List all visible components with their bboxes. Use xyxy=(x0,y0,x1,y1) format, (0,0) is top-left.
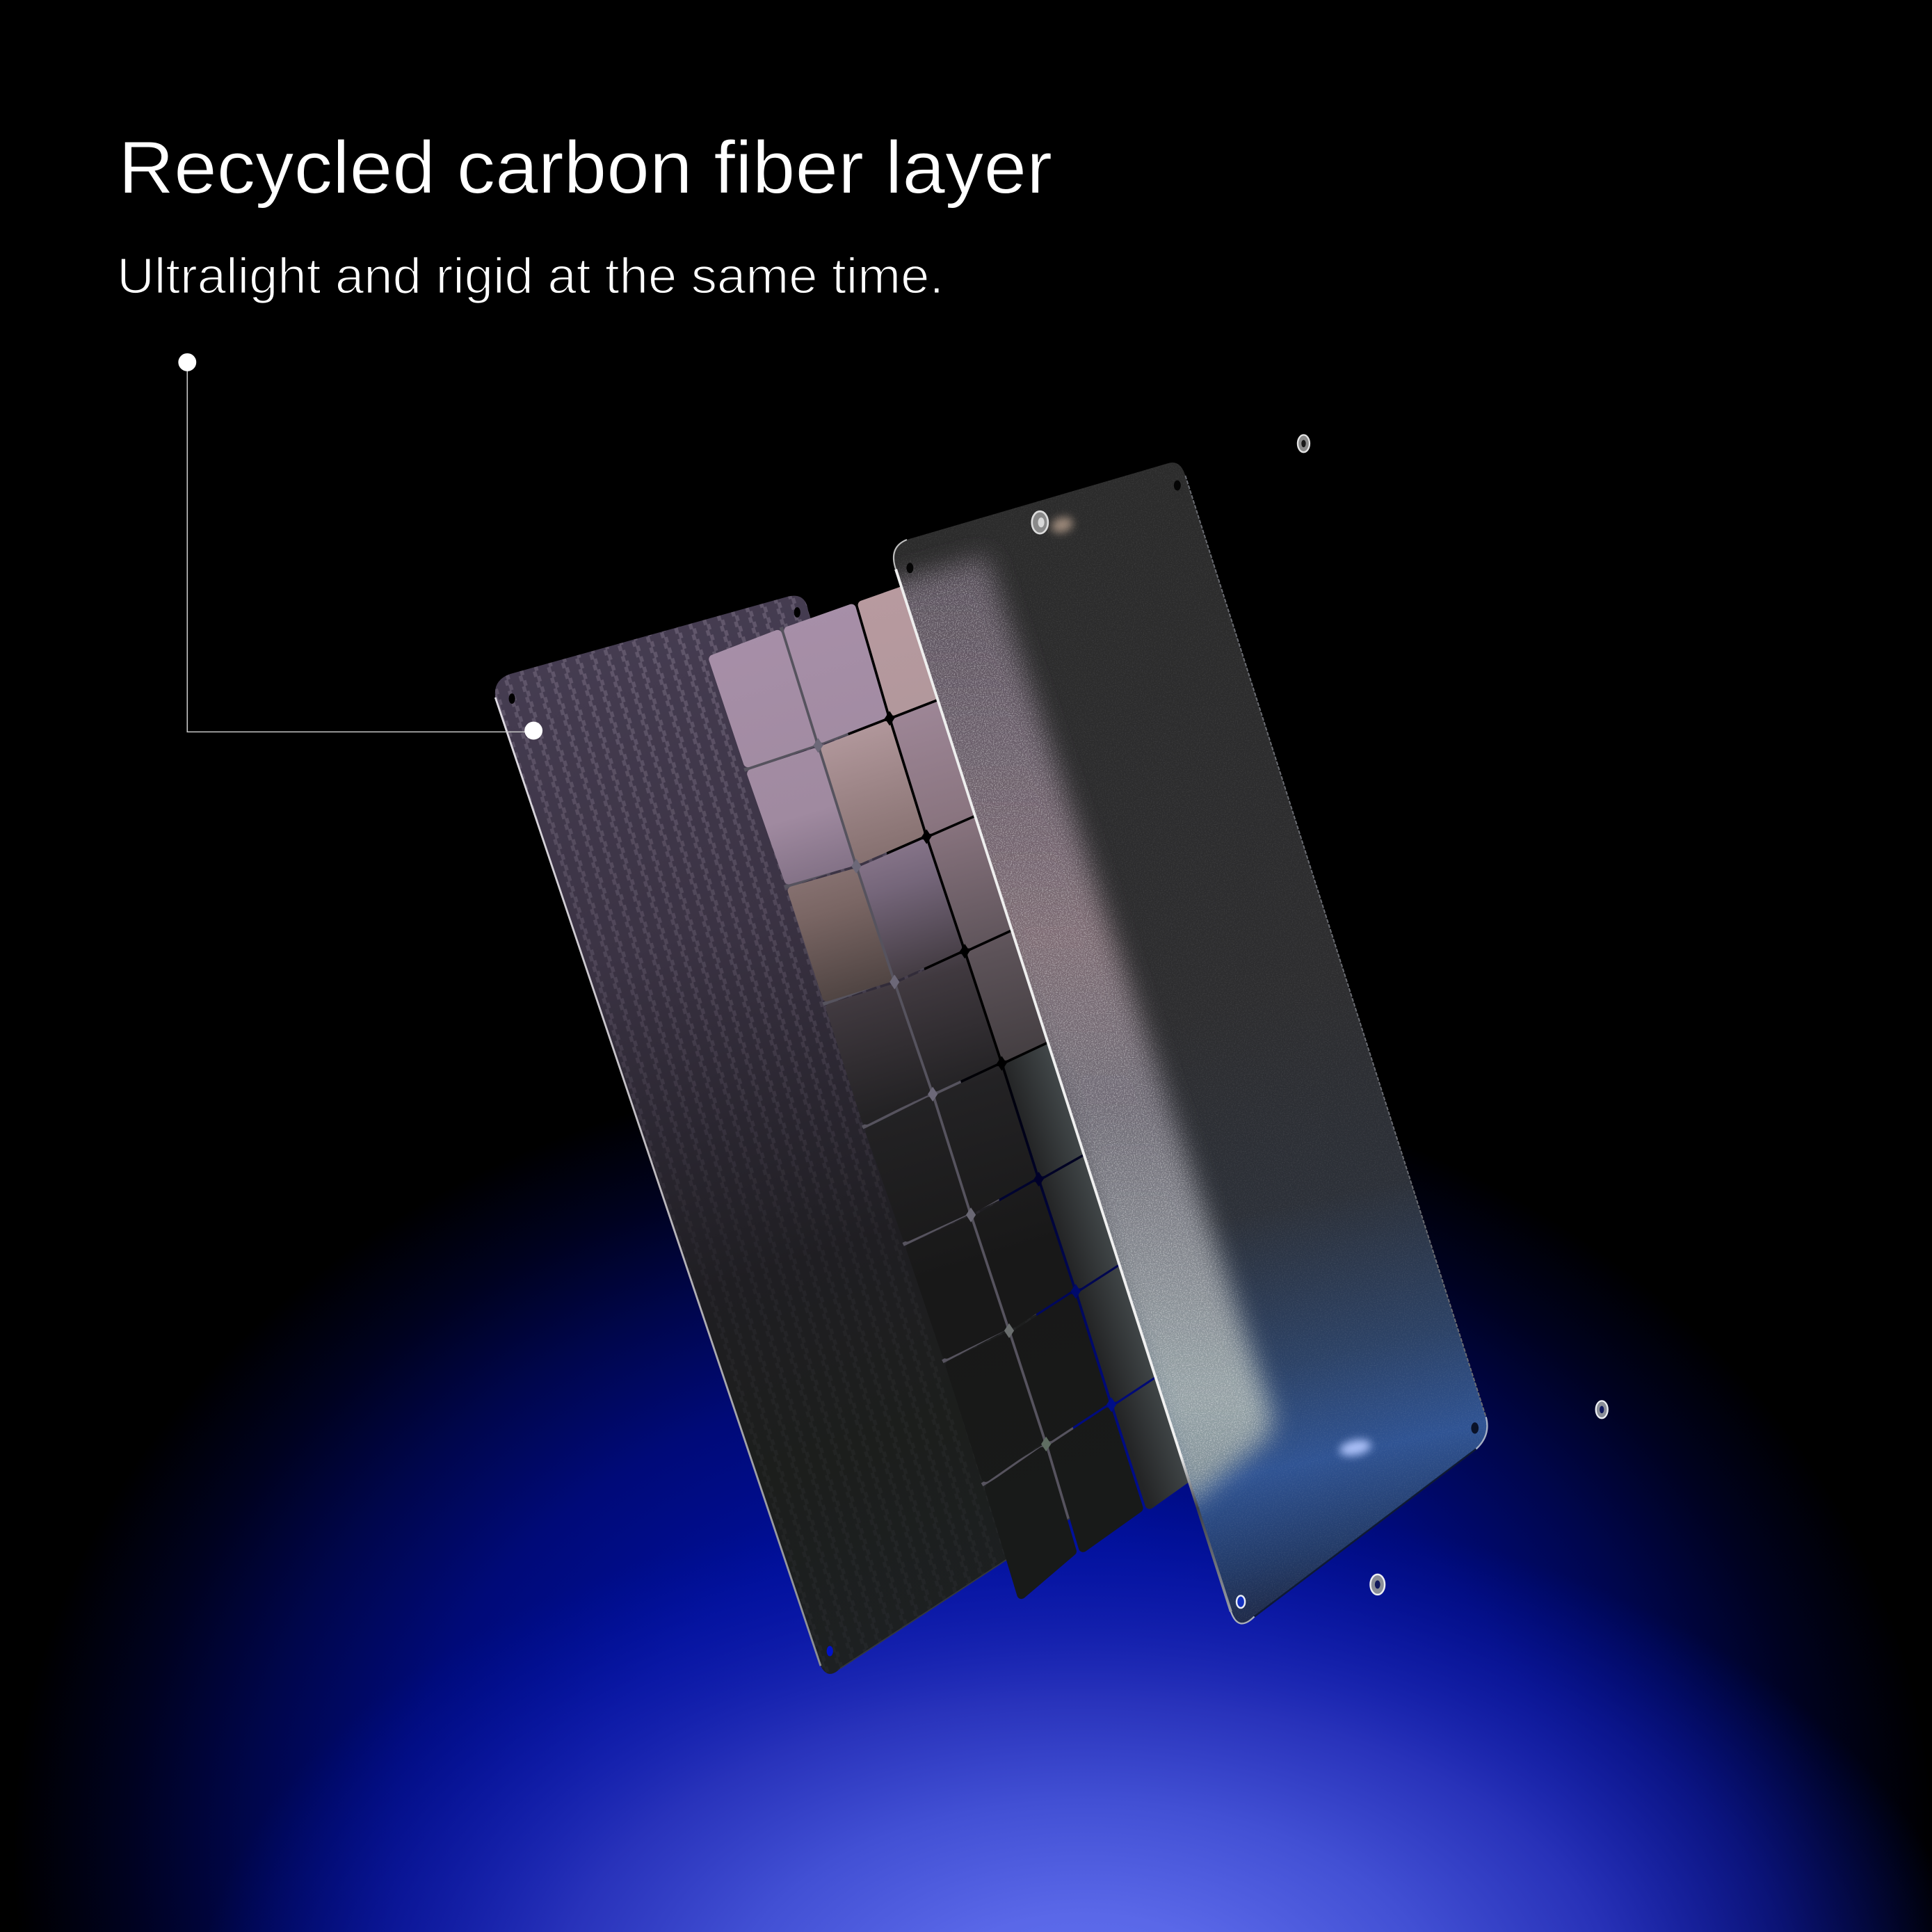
dark cell junctions xyxy=(885,711,1116,1412)
panel: solar cell layer xyxy=(714,583,1205,1595)
icon: loose screw top right xyxy=(1298,435,1310,452)
title: Recycled carbon fiber layer xyxy=(118,126,1052,209)
solar cell column 1 xyxy=(714,634,1072,1595)
panel: recycled carbon fiber back layer xyxy=(495,596,1111,1674)
panel: frosted front glass layer xyxy=(893,462,1488,1625)
front glass edge highlights xyxy=(894,540,907,570)
icon: loose screw right xyxy=(1596,1401,1608,1418)
grey cell junctions xyxy=(813,738,1051,1451)
solar cell column 2 xyxy=(789,609,1138,1547)
solar cell column 3 xyxy=(862,583,1205,1504)
callout line with dots xyxy=(178,353,542,740)
frosted reflection of the solar cells xyxy=(894,463,1486,1622)
screw on front panel xyxy=(1032,511,1048,533)
lit back panel seen through the gaps between cells xyxy=(744,627,1074,1519)
mounting holes xyxy=(906,563,913,573)
icon: loose screw bottom xyxy=(1370,1575,1385,1595)
subtitle: Ultralight and rigid at the same time. xyxy=(117,248,944,305)
specular highlights xyxy=(1049,515,1075,536)
